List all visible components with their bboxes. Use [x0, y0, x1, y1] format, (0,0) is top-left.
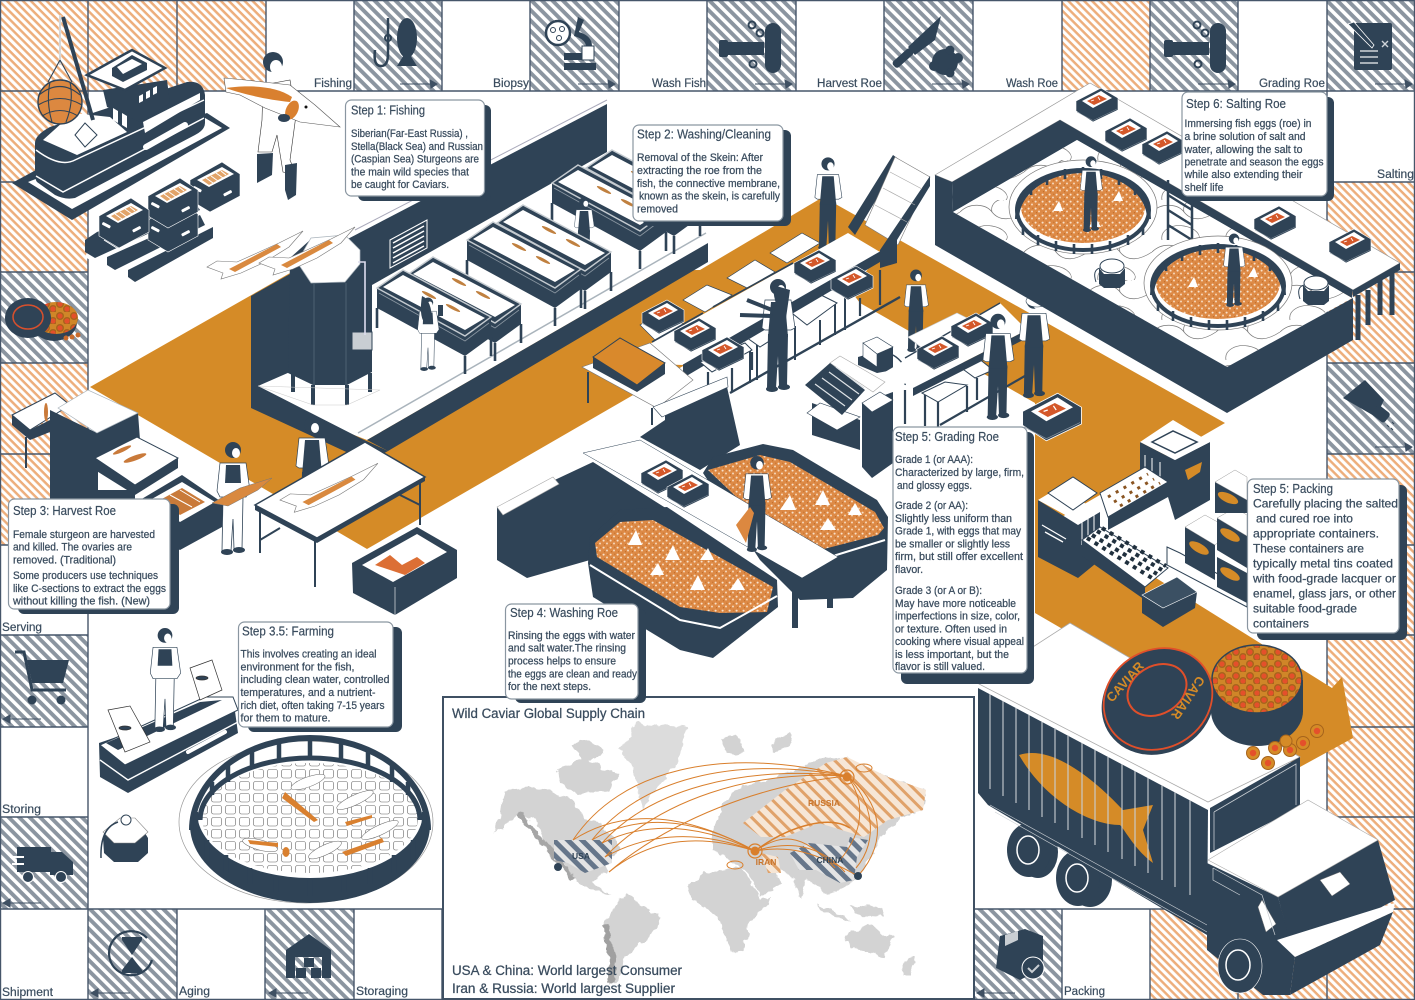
left dark wall and front band [251, 233, 708, 462]
panel: step 3.5 farming [238, 622, 402, 732]
salting worker front [1224, 234, 1245, 307]
truck ribs [990, 694, 1190, 895]
step 6 text: penetrate and season the eggs [1184, 156, 1324, 168]
fish cage [179, 738, 433, 903]
walkway [583, 440, 838, 578]
world map [495, 723, 926, 987]
map caption: USA & China: World largest Consumer [452, 963, 682, 978]
step 3 text: without killing the fish. (New) [12, 596, 150, 608]
panel: step 6 salting [1182, 92, 1334, 201]
packing text: Carefully placing the salted [1253, 496, 1398, 510]
cell labels: Storaging [356, 986, 408, 998]
worker with clipboard [418, 296, 443, 371]
farming tub [99, 697, 238, 793]
worker at table [574, 197, 594, 265]
step 1 text: the main wild species that [351, 166, 469, 178]
washing tables [377, 150, 700, 374]
russia supplier region [743, 757, 926, 837]
step 2 text: removed [637, 204, 678, 216]
step 2 text: Removal of the Skein: After [637, 152, 763, 164]
fishing boat [12, 15, 230, 220]
rear wall [340, 100, 607, 290]
grade 3 text: cooking where visual appeal [895, 636, 1024, 648]
grading title: Step 5: Grading Roe [895, 430, 999, 444]
step 3 belt machine [12, 390, 178, 505]
grading machine [805, 337, 906, 478]
step 6 text: shelf life [1184, 182, 1224, 194]
factory platform [251, 104, 708, 440]
truck rear wheels [1007, 823, 1112, 907]
packing conveyor B [1082, 527, 1168, 600]
stools and rail below conveyor [730, 293, 900, 393]
step 1 text: (Caspian Sea) Sturgeons are [351, 154, 479, 166]
ladder [1168, 180, 1192, 240]
step 1 title: Step 1: Fishing [351, 104, 425, 118]
grade 3 text: May have more noticeable [895, 598, 1016, 610]
farmed fish [248, 792, 384, 857]
truck fish logo [1019, 753, 1153, 863]
step 3 title: Step 3: Harvest Roe [13, 504, 116, 518]
step 2 text: known as the skein, is carefully [639, 190, 781, 202]
step 4 text: for the next steps. [508, 681, 591, 693]
step 6 text: water, allowing the salt to [1184, 144, 1303, 156]
fisherman body [257, 52, 297, 200]
panel: step 1 fishing [346, 100, 491, 201]
small tank [101, 815, 148, 862]
salting platform [935, 83, 1400, 413]
spilled roe [1246, 724, 1324, 770]
pool back [703, 444, 888, 600]
icon: warehouse [286, 934, 331, 978]
step 1 text [351, 128, 483, 191]
step 3.5 text: This involves creating an ideal [240, 648, 376, 660]
tin lid: CAVIAR [1103, 658, 1147, 705]
packing conveyor A [1100, 467, 1168, 530]
step 3 text: and killed. The ovaries are [13, 542, 132, 554]
packing text: with food-grade lacquer or [1252, 572, 1396, 586]
orange floor with direction arrow [90, 197, 1353, 767]
worker long hair [740, 279, 795, 392]
fisherman holding sturgeon [224, 52, 340, 200]
white fish outlines [241, 771, 400, 862]
icon: grading clipboard [1348, 22, 1392, 70]
packing text: suitable food-grade [1253, 602, 1357, 616]
walkway legs [795, 565, 830, 628]
crates on conveyor [642, 250, 873, 371]
icon: hook and fish [375, 18, 417, 66]
packing title: Step 5: Packing [1253, 482, 1333, 496]
boxes and pallet [1167, 470, 1247, 607]
cell labels: Wash Roe [1006, 78, 1058, 90]
worker holding fish [212, 442, 272, 555]
iran supplier region [761, 853, 781, 873]
packing text: enamel, glass jars, or other [1253, 586, 1396, 600]
grade 1 text: Characterized by large, firm, [895, 467, 1024, 479]
cell labels: Harvest Roe [817, 78, 882, 90]
step 3 text: Female sturgeon are harvested [13, 529, 155, 541]
truck [977, 623, 1395, 995]
cell labels: Storing [2, 804, 41, 816]
tin body [1211, 645, 1303, 746]
small devices [1095, 259, 1329, 305]
step 6 text: a brine solution of salt and [1184, 131, 1306, 143]
step 6 title: Step 6: Salting Roe [1186, 97, 1286, 111]
grade 3 text: or texture. Often used in [895, 624, 1007, 636]
step 4 text: process helps to ensure [508, 656, 616, 668]
truck front wheel [1218, 939, 1262, 993]
step 3 text: Some producers use techniques [13, 570, 158, 582]
step 3.5 text: including clean water, controlled [240, 674, 390, 686]
grade 2 text: be smaller or slightly less [895, 538, 1010, 550]
pallet [85, 195, 213, 282]
large crate [1023, 393, 1081, 441]
step 3.5 text: for them to mature. [240, 712, 330, 724]
icon: salt shaker [1343, 380, 1394, 430]
icon: hose for roe [1164, 22, 1226, 73]
icon: packed box check [996, 929, 1044, 980]
supply arcs [573, 763, 878, 876]
cell labels: Packing [1064, 986, 1105, 998]
grade 2 text: flavor. [895, 564, 923, 576]
truck cab [1207, 800, 1395, 995]
salting tank back [1009, 160, 1157, 254]
net of roe [38, 60, 82, 124]
step 1 text: Stella(Black Sea) and Russian [351, 141, 483, 153]
crates on walkway [641, 460, 709, 508]
step 6 text: Immersing fish eggs (roe) in [1184, 118, 1312, 130]
big roe crate [352, 527, 457, 615]
tin lid [1082, 629, 1234, 775]
step 6 text [1184, 118, 1324, 194]
grade 2 text: Grade 1, with eggs that may [895, 526, 1022, 538]
grade 1 text [895, 454, 1024, 492]
step 2 text [637, 152, 781, 216]
usa consumer region [554, 840, 612, 873]
two graders [983, 294, 1050, 420]
packing text [1252, 496, 1398, 630]
grade 2 text: firm, but still offer excellent [895, 551, 1023, 563]
grade 3 text: flavor is still valued. [895, 661, 985, 673]
grade 2 text: Slightly less uniform than [895, 513, 1012, 525]
octagonal tank [258, 235, 380, 405]
step 1 text: be caught for Caviars. [351, 179, 449, 191]
panel: step 5 grading [893, 427, 1034, 684]
crate tables [700, 270, 880, 392]
hull slot [146, 125, 185, 147]
panel: step 5 packing [1248, 479, 1407, 640]
deck [43, 93, 200, 155]
step 1 text: Siberian(Far-East Russia) , [351, 128, 468, 140]
packing text: These containers are [1253, 542, 1364, 556]
caviar tin [1082, 629, 1324, 775]
panel: step 4 washing roe [506, 604, 646, 703]
map caption: Iran & Russia: World largest Supplier [452, 981, 675, 996]
step 2 title: Step 2: Washing/Cleaning [637, 128, 771, 142]
cell labels: Biopsy [493, 78, 529, 90]
grade 3 text: imperfections in size, color, [895, 610, 1020, 622]
map panel [443, 697, 974, 999]
cell labels: Aging [179, 986, 210, 998]
step 3.5 text: temperatures, and a nutrient- [240, 687, 376, 699]
sacks [108, 660, 222, 752]
step 2 text: extracting the roe from the [637, 165, 762, 177]
farmer [150, 628, 181, 732]
crane [60, 15, 97, 147]
step 3 text: removed. (Traditional) [13, 554, 116, 566]
icon: hose [719, 22, 781, 73]
grade 1 text: and glossy eggs. [897, 480, 972, 492]
harvest table [255, 442, 425, 587]
grade 1 text: Grade 1 (or AAA): [895, 454, 973, 466]
country labels: RUSSIA [808, 798, 840, 808]
cell labels: Salting [1377, 169, 1414, 181]
map title: Wild Caviar Global Supply Chain [452, 706, 645, 721]
grade 3 text: is less important, but the [895, 649, 1009, 661]
packing text: containers [1253, 616, 1309, 630]
step 4 text: and salt water.The rinsing [508, 642, 626, 654]
step 4 text: the eggs are clean and ready [508, 668, 638, 680]
conveyor area white pads [640, 233, 820, 345]
step 4 title: Step 4: Washing Roe [510, 606, 618, 620]
sturgeons on floor [207, 227, 355, 279]
tin lid: CAVIAR [1168, 673, 1208, 723]
packing machine tower B [1038, 477, 1100, 578]
packing text: appropriate containers. [1253, 526, 1379, 540]
country labels: CHINA [817, 855, 843, 865]
cell labels: Wash Fish [652, 78, 706, 90]
packing machine tower A [1140, 420, 1210, 520]
lower counter and suitcase table [582, 338, 740, 470]
worker at incline conveyor [815, 157, 842, 250]
panel: step 2 washing [633, 125, 791, 226]
country labels: USA [572, 851, 590, 861]
worker rear [904, 270, 928, 352]
china consumer region [790, 837, 868, 883]
boat cabin [87, 50, 170, 128]
step 3.5 text: environment for the fish, [240, 662, 354, 674]
cell labels: Serving [2, 622, 42, 634]
pool front [588, 507, 778, 658]
grade 2 text [895, 500, 1023, 576]
hull lines [36, 100, 204, 192]
packing text: typically metal tins coated [1253, 556, 1393, 570]
fish bin [140, 475, 223, 550]
incline conveyor [848, 155, 930, 268]
step 6 text: while also extending their [1184, 169, 1303, 181]
icon: shopping cart [15, 652, 69, 704]
sturgeon [224, 78, 340, 127]
step 4 text [508, 630, 638, 693]
salting tank front [1144, 236, 1292, 330]
step 3 text [12, 529, 166, 608]
cell labels: Fishing [314, 78, 352, 90]
panel: step 3 harvest [8, 499, 179, 614]
map caption [452, 963, 682, 996]
map nodes [554, 764, 872, 880]
boat dock [12, 113, 230, 220]
boat hull [35, 82, 205, 199]
packing bin [1142, 577, 1197, 627]
cell labels: Grading Roe [1259, 78, 1325, 90]
country labels: IRAN [756, 857, 776, 867]
step 3 text: like C-sections to extract the eggs [13, 583, 166, 595]
grading conveyor and stools [885, 303, 1030, 428]
main conveyor [648, 233, 880, 378]
fish crates [99, 162, 240, 252]
step 3.5 text [240, 648, 390, 724]
step 3.5 title: Step 3.5: Farming [242, 624, 334, 638]
country labels [572, 798, 843, 867]
step 2 text: fish, the connective membrane, [637, 178, 780, 190]
icon: caviar tin small [5, 298, 80, 341]
grade 3 text [895, 585, 1024, 673]
icon: hourglass aging [109, 931, 152, 975]
crates on platform [1076, 88, 1371, 263]
icon: delivery truck [10, 847, 73, 882]
sink block [497, 462, 672, 578]
packing text: and cured roe into [1256, 512, 1353, 526]
icon: knife and roe [891, 16, 963, 78]
worker on walkway [736, 456, 771, 552]
worker at table [296, 417, 329, 530]
icon: biopsy microscope [546, 17, 596, 70]
cell labels: Shipment [2, 987, 54, 999]
grade 3 text: Grade 3 (or A or B): [895, 585, 982, 597]
salting worker back [1080, 156, 1102, 232]
step 4 text: Rinsing the eggs with water [508, 630, 635, 642]
grade 2 text: Grade 2 (or AA): [895, 500, 968, 512]
step 3.5 text: rich diet, often taking 7-15 years [240, 700, 384, 712]
